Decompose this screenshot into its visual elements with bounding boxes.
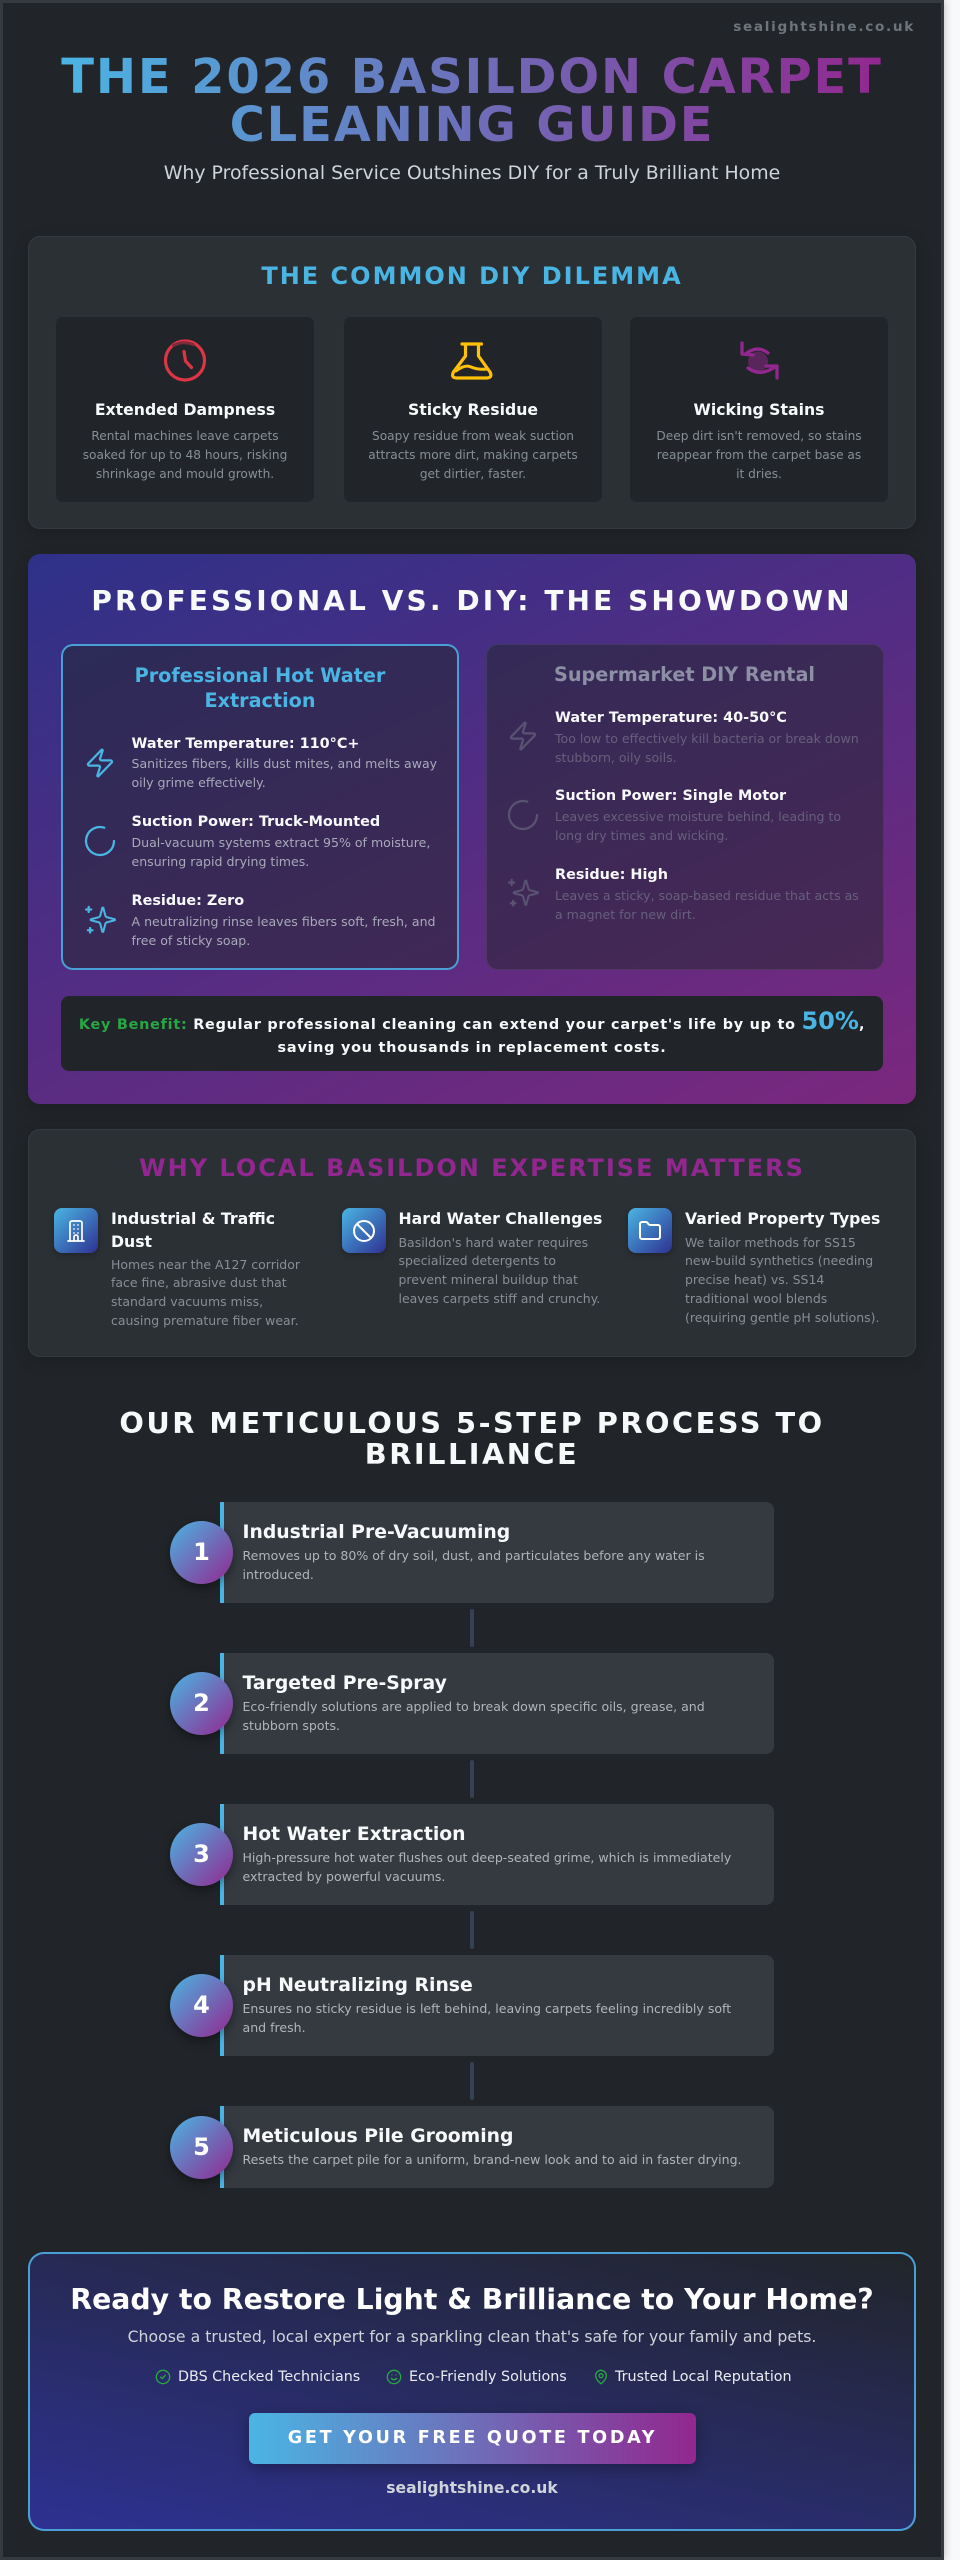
- column text: traditional wool blends: [685, 1291, 827, 1306]
- card text: get dirtier, faster.: [420, 466, 526, 480]
- step title: Industrial Pre-Vacuuming: [242, 1522, 510, 1543]
- step text: Ensures no sticky residue is left behind, leaving carpets feeling incredibly soft: [242, 2000, 731, 2016]
- icon: flask: [451, 342, 492, 380]
- connector 2: [470, 1760, 474, 1798]
- column text: leaves carpets stiff and crunchy.: [398, 1291, 600, 1306]
- heading: showdown: PROFESSIONAL VS. DIY: THE SHOWDOWN: [91, 584, 853, 617]
- column text: precise heat) vs. SS14: [685, 1272, 824, 1287]
- badge: eco-friendly: [386, 2369, 567, 2385]
- column text: face fine, abrasive dust that: [111, 1275, 287, 1290]
- badge label: Trusted Local Reputation: [615, 2369, 792, 2385]
- item text: Leaves excessive moisture behind, leading to: [555, 809, 841, 824]
- card text: attracts more dirt, making carpets: [368, 448, 578, 462]
- title: [58, 53, 886, 149]
- heading: common DIY dilemma: THE COMMON DIY DILEMMA: [261, 262, 683, 290]
- card title: Extended Dampness: [95, 400, 275, 419]
- item text: [555, 888, 859, 922]
- card: extended dampness: [55, 316, 315, 503]
- heading: 5-step process: OUR METICULOUS 5-STEP PROCESS TO: [119, 1406, 825, 1440]
- column text: specialized detergents to: [398, 1253, 556, 1268]
- column text: prevent mineral buildup that: [398, 1272, 578, 1287]
- step card: [220, 1653, 774, 1754]
- icon: zap: [86, 748, 114, 778]
- item title: Water Temperature: 40-50°C: [555, 710, 787, 726]
- button: get your free quote: GET YOUR FREE QUOTE TODAY: [288, 2428, 657, 2448]
- card title: Sticky Residue: [408, 400, 538, 419]
- step text: Removes up to 80% of dry soil, dust, and particulates before any water is: [242, 1548, 705, 1562]
- card text: Deep dirt isn't removed, so stains: [656, 428, 862, 442]
- icon: loader circle: [84, 826, 116, 856]
- step number: 2: [193, 1689, 210, 1717]
- card text: [83, 428, 287, 480]
- connector 1: [470, 1609, 474, 1647]
- item text: Leaves a sticky, soap-based residue that acts as: [555, 888, 859, 903]
- step text: [242, 1548, 705, 1582]
- icon: swirl arrows: [740, 341, 779, 380]
- step 4: [170, 1955, 774, 2056]
- step card: [220, 1804, 774, 1905]
- icon: clock: [164, 339, 206, 382]
- button: get your free quote: [249, 2413, 696, 2464]
- badge: trusted local: [593, 2369, 793, 2385]
- icon: folder: [628, 1208, 672, 1253]
- icon: sparkles: [85, 906, 116, 934]
- key benefit text: Key Benefit: Regular professional cleaning can extend your carpet's life by up to 50%,: [79, 1006, 865, 1034]
- item text: stubborn, oily soils.: [555, 750, 677, 764]
- column text: [111, 1256, 300, 1328]
- card text: reappear from the carpet base as: [657, 448, 861, 462]
- icon: check circle: [156, 2370, 170, 2384]
- column text: We tailor methods for SS15: [685, 1234, 856, 1250]
- step text: [242, 1698, 705, 1732]
- item text: oily grime effectively.: [132, 775, 266, 790]
- column text: Homes near the A127 corridor: [111, 1256, 300, 1272]
- card: sticky residue: [343, 316, 603, 503]
- card text: it dries.: [736, 466, 782, 480]
- column title: Industrial & Traffic: [111, 1209, 275, 1228]
- item text: [132, 914, 435, 948]
- badge label: Eco-Friendly Solutions: [409, 2369, 567, 2385]
- icon: smile: [386, 2369, 402, 2385]
- card text: Soapy residue from weak suction: [372, 428, 574, 442]
- column text: new-build synthetics (needing: [685, 1253, 873, 1268]
- column: hard water challenges: [342, 1208, 602, 1306]
- column: industrial and traffic dust: [54, 1208, 300, 1328]
- item text: a magnet for new dirt.: [555, 907, 696, 922]
- column title: Dust: [111, 1232, 152, 1251]
- badge label: DBS Checked Technicians: [178, 2369, 360, 2385]
- key benefit text: saving you thousands in replacement costs.: [278, 1040, 666, 1056]
- step number: 3: [193, 1840, 210, 1868]
- CTA heading: Ready to Restore Light & Brilliance to Your Home?: [70, 2283, 874, 2316]
- item text: Dual-vacuum systems extract 95% of moisture,: [132, 835, 430, 850]
- step title: pH Neutralizing Rinse: [242, 1975, 473, 1996]
- column title: Hard Water Challenges: [398, 1209, 602, 1228]
- title: THE 2026 BASILDON CARPET: [61, 49, 883, 105]
- card text: shrinkage and mould growth.: [96, 466, 274, 480]
- panel: call to action: [28, 2252, 916, 2531]
- card text: soaked for up to 48 hours, risking: [83, 448, 287, 462]
- professional heading: [135, 664, 386, 712]
- item text: [132, 835, 430, 869]
- step title: Hot Water Extraction: [242, 1824, 466, 1845]
- DIY heading: Supermarket DIY Rental: [554, 663, 815, 686]
- column text: causing premature fiber wear.: [111, 1313, 299, 1328]
- card text: [656, 428, 862, 480]
- step text: extracted by powerful vacuums.: [242, 1868, 445, 1884]
- icon: ban: [342, 1208, 386, 1253]
- step 3: [170, 1804, 774, 1905]
- card title: Wicking Stains: [694, 400, 824, 419]
- card text: Rental machines leave carpets: [91, 428, 279, 442]
- step number: [170, 2116, 233, 2178]
- step number: 4: [193, 1991, 210, 2019]
- icon: building: [54, 1208, 98, 1253]
- step text: High-pressure hot water flushes out deep-seated grime, which is immediately: [242, 1850, 731, 1864]
- column text: [685, 1234, 879, 1325]
- step 1: [170, 1502, 774, 1603]
- heading: local expertise: WHY LOCAL BASILDON EXPERTISE MATTERS: [139, 1154, 805, 1182]
- card text: [368, 428, 578, 480]
- column text: standard vacuums miss,: [111, 1294, 263, 1309]
- column title: Varied Property Types: [685, 1209, 880, 1228]
- step number: [170, 1974, 233, 2037]
- item text: free of sticky soap.: [132, 933, 250, 948]
- domain label: sealightshine.co.uk: [733, 19, 915, 35]
- column: varied property types: [628, 1208, 880, 1325]
- step card: [220, 2106, 774, 2188]
- item text: Sanitizes fibers, kills dust mites, and melts away: [132, 756, 437, 771]
- step 2: [170, 1653, 774, 1754]
- step text: Resets the carpet pile for a uniform, brand-new look and to aid in faster drying.: [242, 2152, 742, 2166]
- item title: Suction Power: Single Motor: [555, 788, 786, 804]
- step text: Eco-friendly solutions are applied to break down specific oils, grease, and: [242, 1698, 705, 1714]
- item text: long dry times and wicking.: [555, 828, 728, 843]
- step number: [170, 1672, 233, 1735]
- subtitle: Why Professional Service Outshines DIY for a Truly Brilliant Home: [164, 162, 780, 184]
- card: wicking stains: [629, 316, 889, 503]
- icon: sparkles muted: [508, 878, 539, 906]
- item title: Suction Power: Truck-Mounted: [132, 814, 380, 830]
- step 5: [170, 2106, 774, 2188]
- footer domain: sealightshine.co.uk: [386, 2479, 558, 2497]
- connector 4: [470, 2062, 474, 2100]
- professional heading: Extraction: [204, 689, 316, 712]
- item title: Residue: Zero: [132, 893, 244, 909]
- key benefit text: [79, 1006, 865, 1056]
- item text: A neutralizing rinse leaves fibers soft, fresh, and: [132, 914, 435, 929]
- item text: ensuring rapid drying times.: [132, 854, 309, 869]
- column text: (requiring gentle pH solutions).: [685, 1310, 879, 1325]
- panel: professional hot water extraction: [61, 644, 459, 970]
- icon: map pin: [593, 2369, 609, 2385]
- step text: introduced.: [242, 1566, 314, 1582]
- step card: [220, 1955, 774, 2056]
- step card: [220, 1502, 774, 1603]
- heading: 5-step process: [119, 1406, 825, 1470]
- item text: [555, 730, 859, 764]
- column title: [111, 1209, 275, 1251]
- title: CLEANING GUIDE: [230, 97, 714, 153]
- connector 3: [470, 1911, 474, 1949]
- column text: Basildon's hard water requires: [398, 1234, 588, 1250]
- panel: professional vs DIY showdown: [28, 554, 916, 1104]
- professional heading: Professional Hot Water: [135, 664, 385, 687]
- CTA subtext: Choose a trusted, local expert for a sparkling clean that's safe for your family and pets.: [128, 2327, 816, 2346]
- column text: [398, 1234, 600, 1306]
- step number: [170, 1823, 233, 1886]
- step number: [170, 1521, 233, 1584]
- icon: loader muted: [508, 800, 538, 830]
- panel: the common DIY dilemma: [28, 236, 916, 529]
- panel: local Basildon expertise: [28, 1129, 916, 1357]
- item title: Water Temperature: 110°C+: [132, 736, 359, 752]
- badge: DBS checked: [156, 2369, 360, 2385]
- icon: zap muted: [510, 722, 536, 750]
- heading: 5-step process: BRILLIANCE: [365, 1436, 579, 1470]
- item title: Residue: High: [555, 867, 668, 883]
- panel: supermarket DIY rental: [486, 644, 884, 970]
- step number: 5: [193, 2132, 210, 2160]
- item text: [555, 809, 841, 843]
- step text: [242, 2000, 731, 2034]
- step title: Targeted Pre-Spray: [242, 1673, 447, 1694]
- callout: key benefit: [61, 996, 883, 1071]
- step title: Meticulous Pile Grooming: [242, 2126, 514, 2147]
- step text: [242, 1850, 731, 1884]
- step text: and fresh.: [242, 2020, 306, 2034]
- item text: [132, 756, 437, 790]
- item text: Too low to effectively kill bacteria or break down: [555, 730, 859, 746]
- step number: 1: [193, 1538, 210, 1566]
- step text: stubborn spots.: [242, 1718, 340, 1732]
